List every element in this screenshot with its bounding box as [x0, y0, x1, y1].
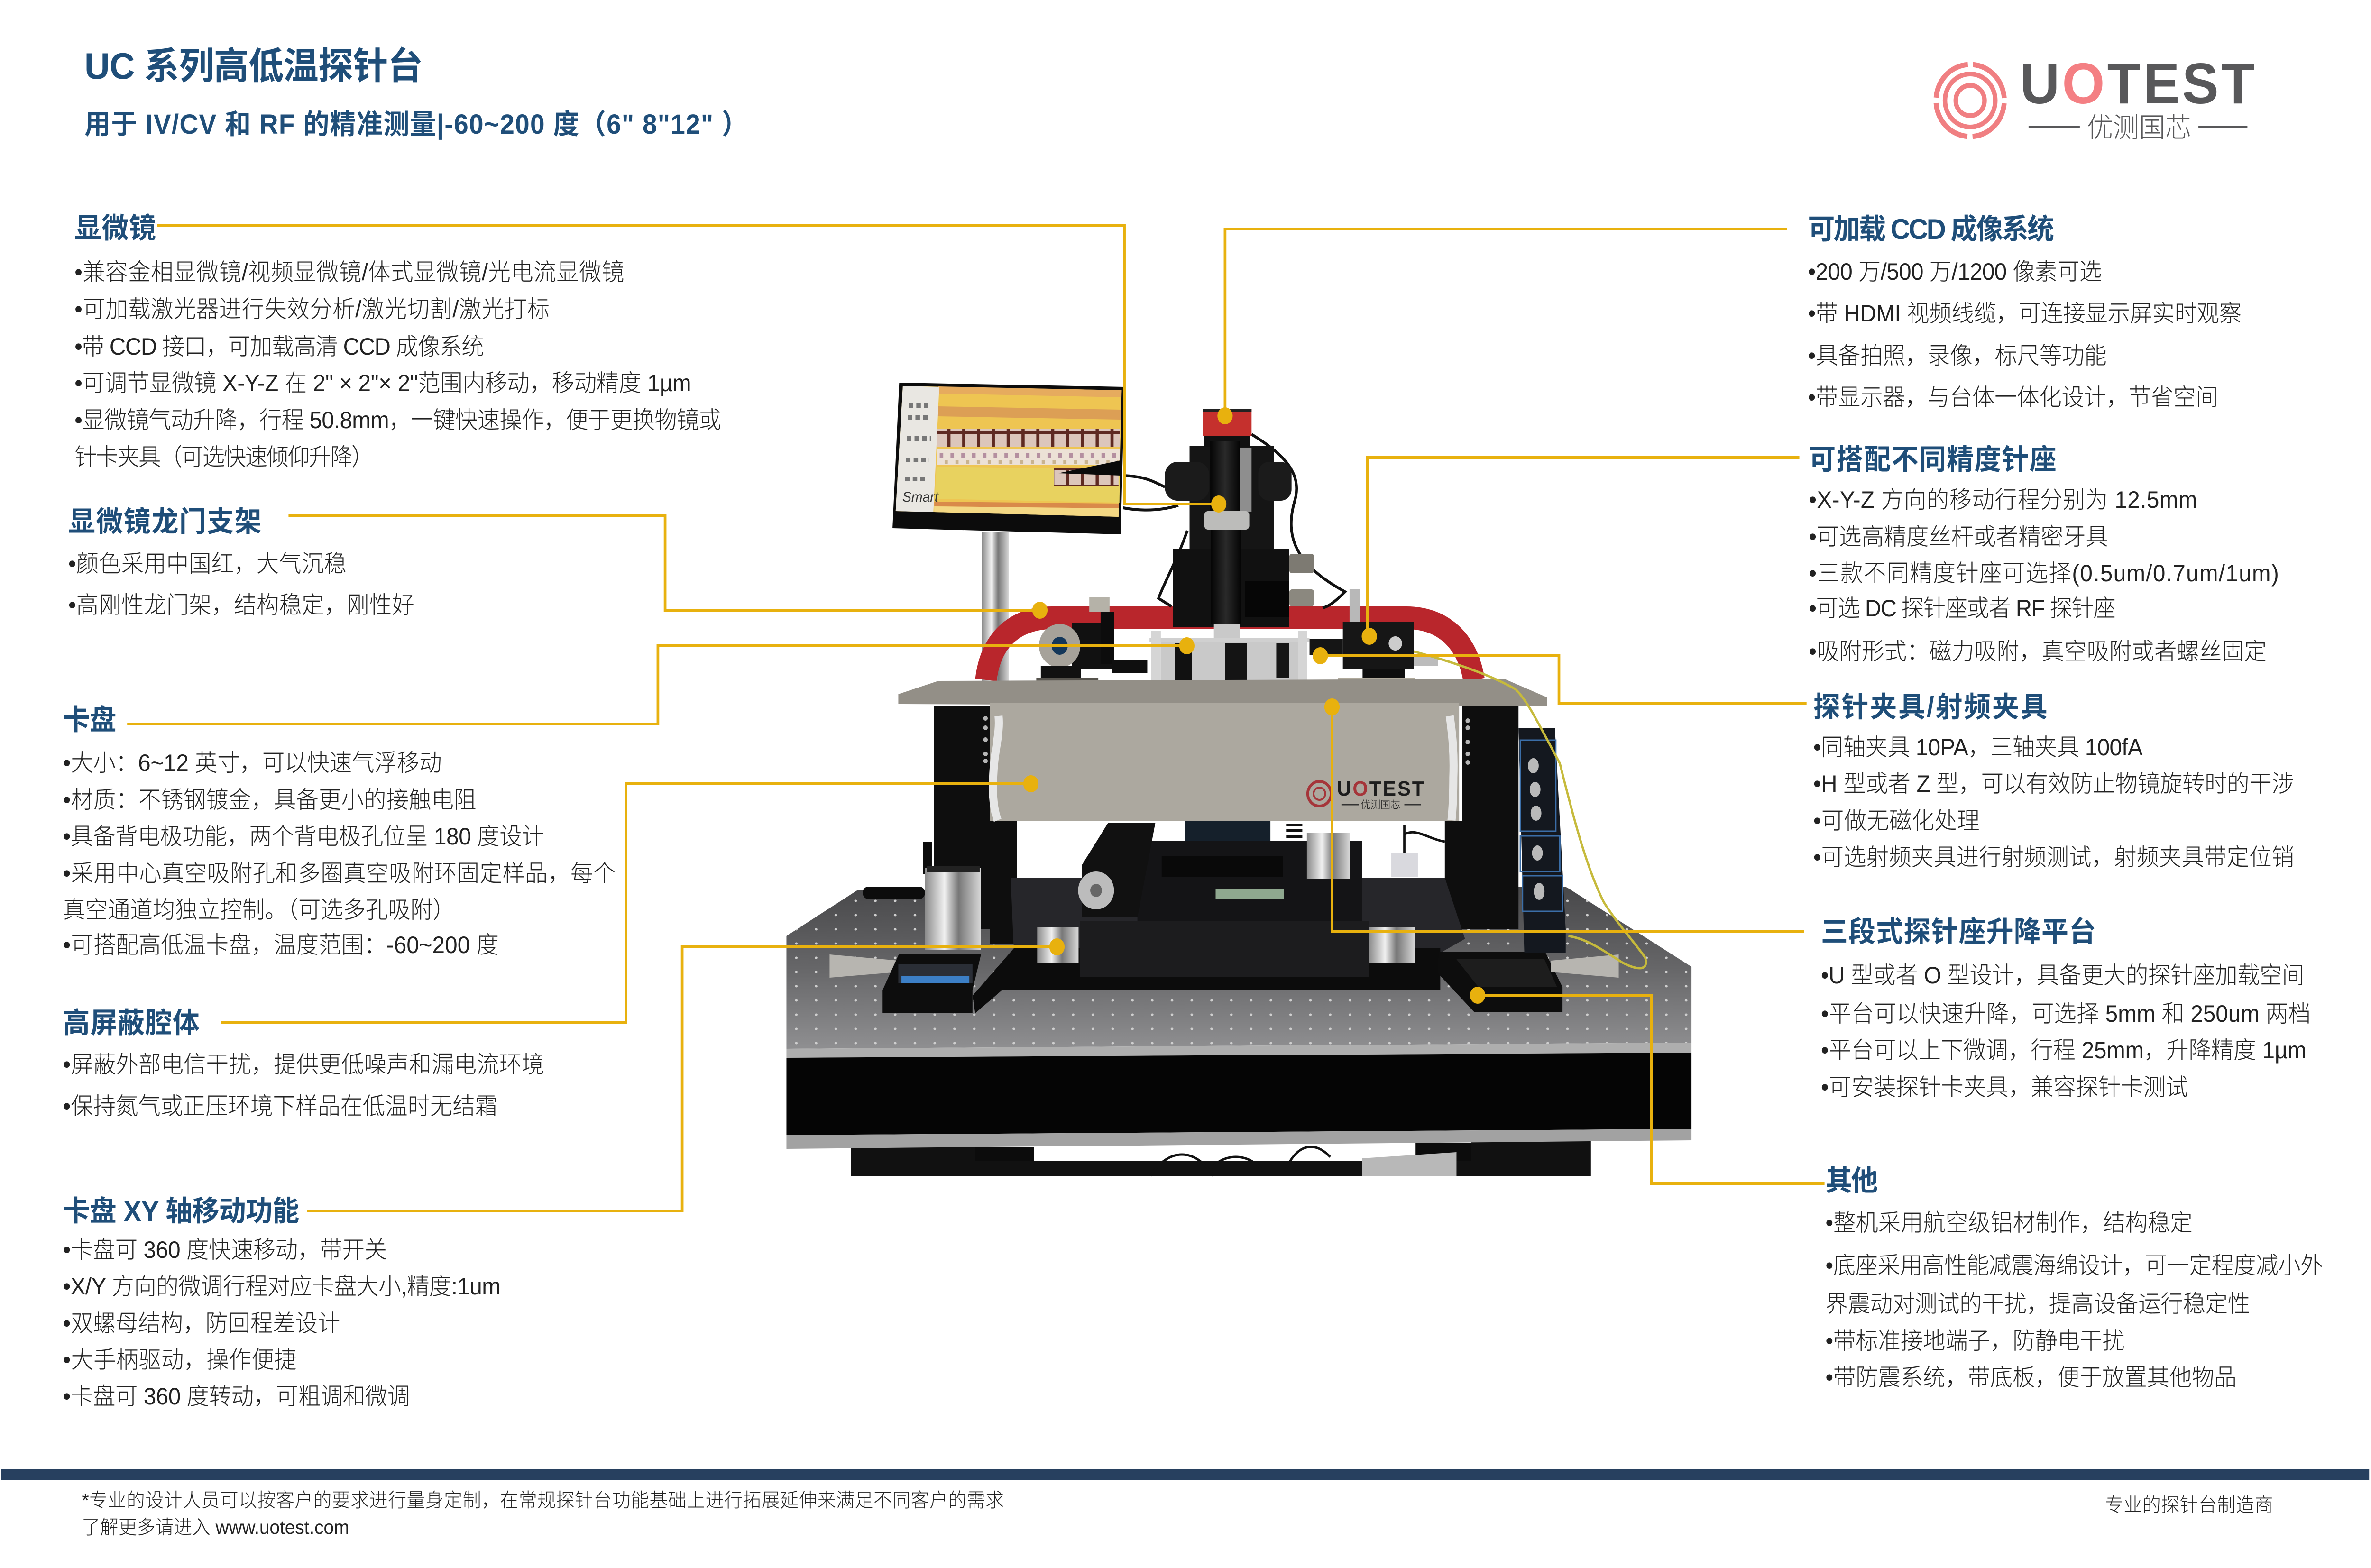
panel: shield	[63, 1008, 544, 1119]
panel: chuck: •具备背电极功能，两个背电极孔位呈 180 度设计	[63, 824, 544, 850]
panel: XY: •双螺母结构，防回程差设计	[63, 1311, 340, 1337]
panel: CCD: •带显示器，与台体一体化设计，节省空间	[1808, 385, 2218, 411]
optical table	[786, 887, 1691, 1176]
footer note: *专业的设计人员可以按客户的要求进行量身定制，在常规探针台功能基础上进行拓展延伸来满足不同客户的需求	[82, 1490, 1004, 1511]
footer note: 了解更多请进入 www.uotest.com	[82, 1517, 349, 1538]
panel: probe base: •吸附形式：磁力吸附，真空吸附或者螺丝固定	[1809, 639, 2267, 665]
footer tagline: 专业的探针台制造商	[2105, 1495, 2273, 1516]
chuck holder	[1149, 631, 1310, 690]
panel: shield: 高屏蔽腔体	[63, 1008, 200, 1039]
leader: microscope	[157, 226, 1226, 513]
panel: chuck	[63, 705, 616, 958]
leader: platform	[1324, 698, 1804, 932]
panel: CCD: 可加载 CCD 成像系统	[1808, 214, 2054, 245]
panel: chuck: 真空通道均独立控制。（可选多孔吸附）	[63, 897, 455, 923]
panel: XY	[63, 1196, 501, 1410]
panel: microscope: 显微镜	[74, 213, 156, 244]
shield box	[990, 703, 1459, 821]
product photo: probe station	[786, 383, 1691, 1176]
panel: chuck: •大小：6~12 英寸，可以快速气浮移动	[63, 750, 442, 776]
panel: gantry: •高刚性龙门架，结构稳定，刚性好	[68, 592, 414, 618]
footer note	[82, 1490, 1004, 1538]
panel: platform: •U 型或者 O 型设计，具备更大的探针座加载空间	[1821, 963, 2305, 989]
panel: clamp: •H 型或者 Z 型，可以有效防止物镜旋转时的干涉	[1813, 771, 2294, 797]
leader: chuck	[127, 637, 1195, 724]
pillars	[934, 706, 1518, 944]
panel: gantry: •颜色采用中国红，大气沉稳	[68, 551, 347, 577]
panel: chuck: •可搭配高低温卡盘，温度范围：-60~200 度	[63, 932, 499, 958]
logo: UOTEST: 优测国芯	[2087, 112, 2191, 143]
footer bar	[1, 1469, 2369, 1480]
panel: other: •带防震系统，带底板，便于放置其他物品	[1826, 1365, 2237, 1391]
panel: other: •底座采用高性能减震海绵设计，可一定程度减小外	[1826, 1253, 2323, 1279]
panel: XY: •卡盘可 360 度快速移动，带开关	[63, 1237, 387, 1263]
pillar screws	[983, 716, 1470, 765]
panel: XY: 卡盘 XY 轴移动功能	[63, 1196, 299, 1227]
top plate	[898, 679, 1547, 706]
yellow cable	[1414, 651, 1646, 968]
title: UC 系列高低温探针台	[84, 46, 423, 87]
panel: microscope: •带 CCD 接口，可加载高清 CCD 成像系统	[74, 334, 484, 360]
handles and feet	[829, 954, 1619, 1013]
box logo: 优测国芯	[1361, 799, 1400, 811]
base plate	[973, 878, 1562, 1013]
panel: microscope	[74, 213, 721, 470]
panel: probe base: 可搭配不同精度针座	[1809, 444, 2057, 476]
panel: platform: •可安装探针卡夹具，兼容探针卡测试	[1821, 1074, 2188, 1100]
panel: platform: 三段式探针座升降平台	[1821, 917, 2096, 948]
panel: clamp: •可选射频夹具进行射频测试，射频夹具带定位销	[1813, 844, 2294, 871]
panel: other: 其他	[1826, 1165, 1878, 1197]
panel: gantry: 显微镜龙门支架	[68, 506, 262, 538]
panel: microscope: •兼容金相显微镜/视频显微镜/体式显微镜/光电流显微镜	[74, 259, 624, 285]
panel: other: 界震动对测试的干扰，提高设备运行稳定性	[1826, 1291, 2250, 1317]
panel: platform	[1821, 917, 2311, 1100]
box logo	[1308, 777, 1424, 811]
panel: clamp: •同轴夹具 10PA，三轴夹具 100fA	[1813, 734, 2143, 761]
left vacuum cylinder	[863, 842, 981, 950]
panel: clamp: •可做无磁化处理	[1813, 808, 1980, 834]
panel: XY: •卡盘可 360 度转动，可粗调和微调	[63, 1384, 410, 1410]
panel: platform: •平台可以快速升降，可选择 5mm 和 250um 两档	[1821, 1001, 2311, 1027]
leader: clamp	[1313, 647, 1807, 703]
control panel	[1518, 728, 1566, 953]
panel: microscope: •可加载激光器进行失效分析/激光切割/激光打标	[74, 296, 550, 322]
panel: shield: •屏蔽外部电信干扰，提供更低噪声和漏电流环境	[63, 1052, 544, 1078]
panel: gantry	[68, 506, 414, 618]
stages	[1037, 821, 1445, 977]
leader: gantry	[288, 516, 1048, 619]
monitor cables	[1123, 434, 1345, 608]
panel: CCD	[1808, 214, 2242, 411]
monitor	[892, 383, 1124, 534]
monitor pole	[982, 532, 1009, 684]
panel: other	[1826, 1165, 2323, 1391]
panel: other: •带标准接地端子，防静电干扰	[1826, 1328, 2125, 1354]
red gantry arch	[986, 618, 1474, 680]
subtitle: 用于 IV/CV 和 RF 的精准测量|-60~200 度（6" 8"12" ）	[84, 109, 748, 140]
panel: CCD: •200 万/500 万/1200 像素可选	[1808, 259, 2102, 285]
box logo: UOTEST	[1337, 777, 1424, 800]
panel: chuck: •采用中心真空吸附孔和多圈真空吸附环固定样品，每个	[63, 861, 616, 887]
leader: CCD	[1217, 229, 1787, 424]
panel: CCD: •具备拍照，录像，标尺等功能	[1808, 343, 2107, 369]
panel: probe base: •X-Y-Z 方向的移动行程分别为 12.5mm	[1809, 487, 2197, 513]
probe positioners	[1036, 589, 1438, 689]
leader: other	[1470, 987, 1825, 1183]
panel: CCD: •带 HDMI 视频线缆，可连接显示屏实时观察	[1808, 301, 2242, 327]
panel: clamp: 探针夹具/射频夹具	[1813, 692, 2048, 723]
panel: probe base	[1809, 444, 2279, 665]
panel: platform: •平台可以上下微调，行程 25mm，升降精度 1µm	[1821, 1037, 2307, 1064]
leader: probe base	[1361, 458, 1800, 645]
panel: chuck: 卡盘	[63, 705, 116, 736]
monitor: Smart	[902, 489, 939, 505]
panel: chuck: •材质：不锈钢镀金，具备更小的接触电阻	[63, 787, 477, 813]
panel: shield: •保持氮气或正压环境下样品在低温时无结霜	[63, 1093, 497, 1119]
panel: probe base: •三款不同精度针座可选择(0.5um/0.7um/1um)	[1809, 560, 2279, 587]
microscope	[1165, 409, 1314, 638]
logo: UOTEST	[1936, 51, 2255, 143]
logo: UOTEST: UOTEST	[2020, 51, 2255, 116]
panel: XY: •大手柄驱动，操作便捷	[63, 1347, 296, 1373]
leader: shield	[221, 775, 1038, 1023]
panel: other: •整机采用航空级铝材制作，结构稳定	[1826, 1210, 2193, 1236]
panel: clamp	[1813, 692, 2294, 871]
leader: XY	[307, 938, 1065, 1211]
panel: probe base: •可选高精度丝杆或者精密牙具	[1809, 524, 2108, 550]
panel: microscope: 针卡夹具（可选快速倾仰升降）	[74, 444, 374, 470]
panel: probe base: •可选 DC 探针座或者 RF 探针座	[1809, 596, 2116, 622]
panel: microscope: •可调节显微镜 X-Y-Z 在 2" × 2"× 2"范围内移动，移动精度 1µm	[74, 370, 691, 396]
panel: microscope: •显微镜气动升降，行程 50.8mm，一键快速操作，便于更换物镜或	[74, 407, 721, 433]
panel: XY: •X/Y 方向的微调行程对应卡盘大小,精度:1um	[63, 1274, 501, 1300]
